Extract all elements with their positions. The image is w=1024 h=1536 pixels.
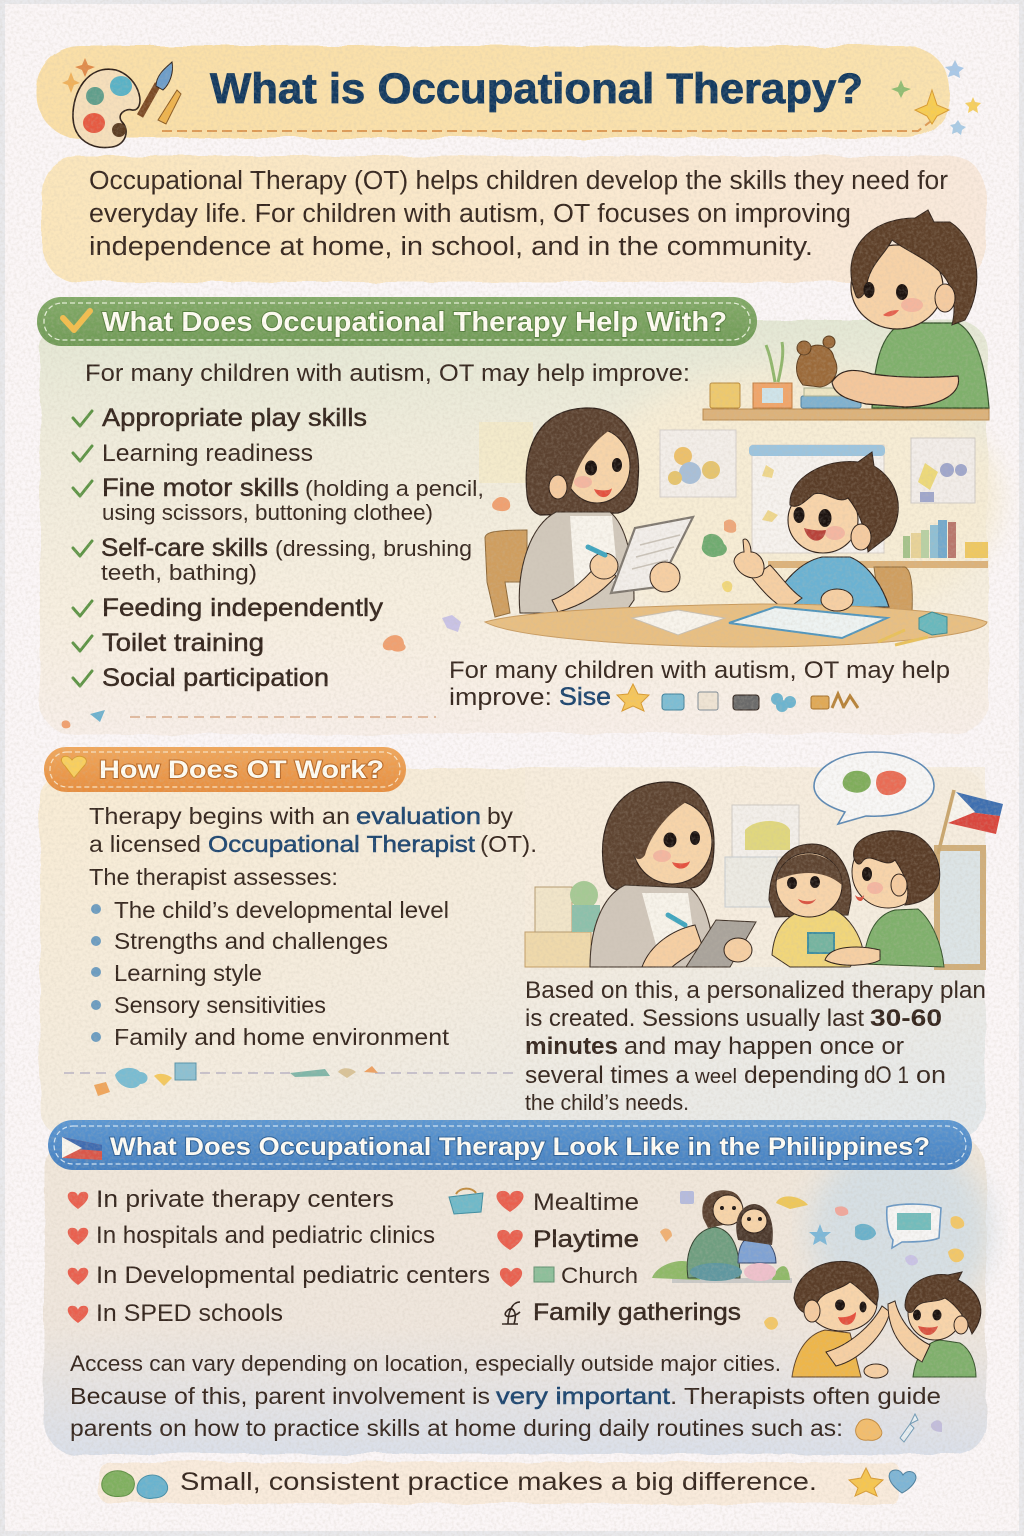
text: access and parent involvement: . Therapists often guide bbox=[670, 1383, 941, 1409]
closing text: Small, consistent practice makes a big difference. bbox=[180, 1468, 817, 1496]
chair behind boy bbox=[874, 567, 912, 612]
intro text: everyday life. For children with autism, OT focuses on improving bbox=[89, 200, 851, 228]
checklist: Social participation bbox=[102, 664, 329, 692]
icon: flag bbox=[62, 1137, 102, 1160]
icon: decorative stars bbox=[891, 60, 981, 135]
text: therapy plan: the child’s needs. bbox=[525, 1090, 689, 1115]
bullet list: assessment items: Strengths and challenges bbox=[114, 928, 388, 954]
icon row: routines bbox=[856, 1414, 942, 1442]
checklist: Toilet training bbox=[102, 629, 264, 657]
icon row: star and toys bbox=[617, 684, 858, 712]
checklist: Self-care skills bbox=[101, 534, 268, 562]
text: evaluation intro: Therapy begins with an bbox=[89, 803, 350, 829]
text: evaluation intro: Occupational Therapist bbox=[208, 831, 476, 857]
list: settings: In Developmental pediatric centers bbox=[96, 1262, 490, 1289]
bookshelf bbox=[768, 520, 988, 568]
illustration backdrop bbox=[580, 370, 1000, 630]
text: access and parent involvement bbox=[70, 1351, 941, 1441]
section heading: Philippines: What Does Occupational Therapy Look Like in the Philippines? bbox=[110, 1133, 930, 1161]
list: daily routines: Church bbox=[561, 1263, 638, 1288]
bullet list: assessment items: Sensory sensitivities bbox=[114, 992, 326, 1018]
list: settings: In SPED schools bbox=[96, 1300, 283, 1327]
section heading: how OT works bbox=[44, 747, 406, 792]
bullet list: assessment items: The child’s developmental level bbox=[114, 897, 449, 923]
checklist: Appropriate play skills bbox=[102, 404, 367, 432]
text: access and parent involvement: very important bbox=[496, 1383, 671, 1409]
title text: What is Occupational Therapy? bbox=[210, 65, 863, 113]
intro text: Occupational Therapy (OT) helps children develop the skills they need for bbox=[89, 167, 949, 195]
dashed divider bbox=[130, 716, 436, 718]
decorated divider bbox=[64, 1063, 515, 1096]
illustration: scattered toys and speech bubble bbox=[660, 1191, 964, 1330]
checklist: Feeding independently bbox=[102, 594, 384, 622]
text: therapy plan: depending bbox=[744, 1062, 859, 1089]
text: therapy plan bbox=[525, 977, 986, 1115]
blue wash on the right bbox=[810, 1140, 990, 1320]
illustration: therapist and boy at a table bbox=[62, 408, 988, 728]
list: daily routines: Mealtime bbox=[533, 1189, 639, 1216]
section heading: help with bbox=[37, 297, 757, 346]
text: caption under illustration: Sise bbox=[559, 683, 611, 711]
text: evaluation intro: by bbox=[487, 803, 513, 829]
text: evaluation intro: evaluation bbox=[356, 803, 481, 829]
checklist: Fine motor skills bbox=[102, 474, 299, 502]
checklist: (holding a pencil, bbox=[305, 476, 484, 501]
list: settings bbox=[68, 1186, 490, 1327]
illustration: therapist with two children bbox=[525, 752, 1003, 967]
subheading text: For many children with autism, OT may help improve: bbox=[85, 360, 690, 387]
panel: what OT helps with bbox=[37, 210, 1000, 734]
list: settings: In private therapy centers bbox=[96, 1186, 394, 1213]
checklist: Learning readiness bbox=[102, 440, 313, 467]
illustration: mother and daughter sitting bbox=[652, 1190, 792, 1283]
title banner bbox=[36, 46, 981, 148]
checklist: using scissors, buttoning clothee) bbox=[102, 500, 433, 525]
text: evaluation intro: The therapist assesses: bbox=[89, 864, 338, 890]
section heading: help with: What Does Occupational Therapy Help With? bbox=[102, 306, 727, 337]
panel: introduction bbox=[42, 156, 986, 282]
list: daily routines: Family gatherings bbox=[533, 1299, 741, 1326]
icon: star and heart bbox=[849, 1468, 916, 1496]
text: therapy plan: and may happen once or bbox=[624, 1033, 904, 1060]
bullet list: assessment items: Learning style bbox=[114, 960, 262, 986]
list: daily routines: Playtime bbox=[533, 1226, 639, 1253]
room background bbox=[525, 805, 983, 967]
speech bubble with puzzle pieces bbox=[814, 752, 934, 824]
icon: basket bbox=[449, 1189, 483, 1214]
text: therapy plan: is created. Sessions usually last bbox=[525, 1005, 864, 1032]
puzzle blobs bbox=[62, 497, 736, 728]
chair behind woman bbox=[485, 530, 527, 617]
text: evaluation intro bbox=[89, 803, 537, 890]
checklist: (dressing, brushing bbox=[275, 536, 472, 561]
checklist: teeth, bathing) bbox=[101, 560, 257, 585]
notebook and toys bbox=[729, 607, 947, 645]
text: therapy plan: on bbox=[916, 1062, 946, 1089]
text: evaluation intro: (OT). bbox=[480, 831, 537, 857]
wall posters bbox=[479, 422, 975, 553]
list: settings: In hospitals and pediatric clinics bbox=[96, 1222, 435, 1249]
boy bbox=[825, 831, 944, 967]
illustration: two boys high five bbox=[792, 1261, 981, 1378]
illustration: boy at shelf with bear bbox=[703, 210, 989, 420]
closing message banner bbox=[100, 1462, 916, 1504]
text: therapy plan: weel bbox=[694, 1066, 737, 1088]
text: evaluation intro: a licensed bbox=[89, 831, 201, 857]
girl bbox=[769, 844, 863, 967]
icon: paint palette and brush bbox=[62, 58, 181, 148]
text: access and parent involvement: Because of this, parent involvement is bbox=[70, 1383, 490, 1409]
bullet list: assessment items bbox=[91, 897, 450, 1050]
text: therapy plan: minutes bbox=[525, 1033, 618, 1060]
text: therapy plan: Based on this, a personalized therapy plan bbox=[525, 977, 986, 1004]
bullet list: assessment items: Family and home environment bbox=[114, 1024, 450, 1050]
panel: OT in the Philippines bbox=[44, 1120, 990, 1454]
woman bbox=[519, 408, 693, 613]
section heading: Philippines bbox=[48, 1120, 972, 1170]
text: access and parent involvement: Access can vary depending on location, especially outside major cities. bbox=[70, 1351, 781, 1376]
text: access and parent involvement: parents on how to practice skills at home during daily routines such as: bbox=[70, 1415, 843, 1441]
intro text: independence at home, in school, and in the community. bbox=[89, 233, 813, 261]
Philippine flag bbox=[938, 790, 1003, 854]
text: therapy plan: dO 1 bbox=[864, 1062, 909, 1089]
boy bbox=[734, 452, 898, 610]
table bbox=[485, 604, 987, 647]
woman bbox=[590, 782, 756, 967]
list: daily routines bbox=[496, 1189, 741, 1326]
text: caption under illustration bbox=[449, 657, 950, 711]
panel: how OT works bbox=[40, 747, 1003, 1138]
text: caption under illustration: improve: bbox=[449, 684, 552, 711]
icon: puzzle pieces bbox=[102, 1471, 168, 1498]
checklist bbox=[73, 404, 484, 692]
text: caption under illustration: For many children with autism, OT may help bbox=[449, 657, 950, 684]
text: therapy plan: several times a bbox=[525, 1062, 690, 1089]
section heading: how OT works: How Does OT Work? bbox=[99, 756, 384, 784]
text: therapy plan: 30-60 bbox=[870, 1005, 942, 1032]
